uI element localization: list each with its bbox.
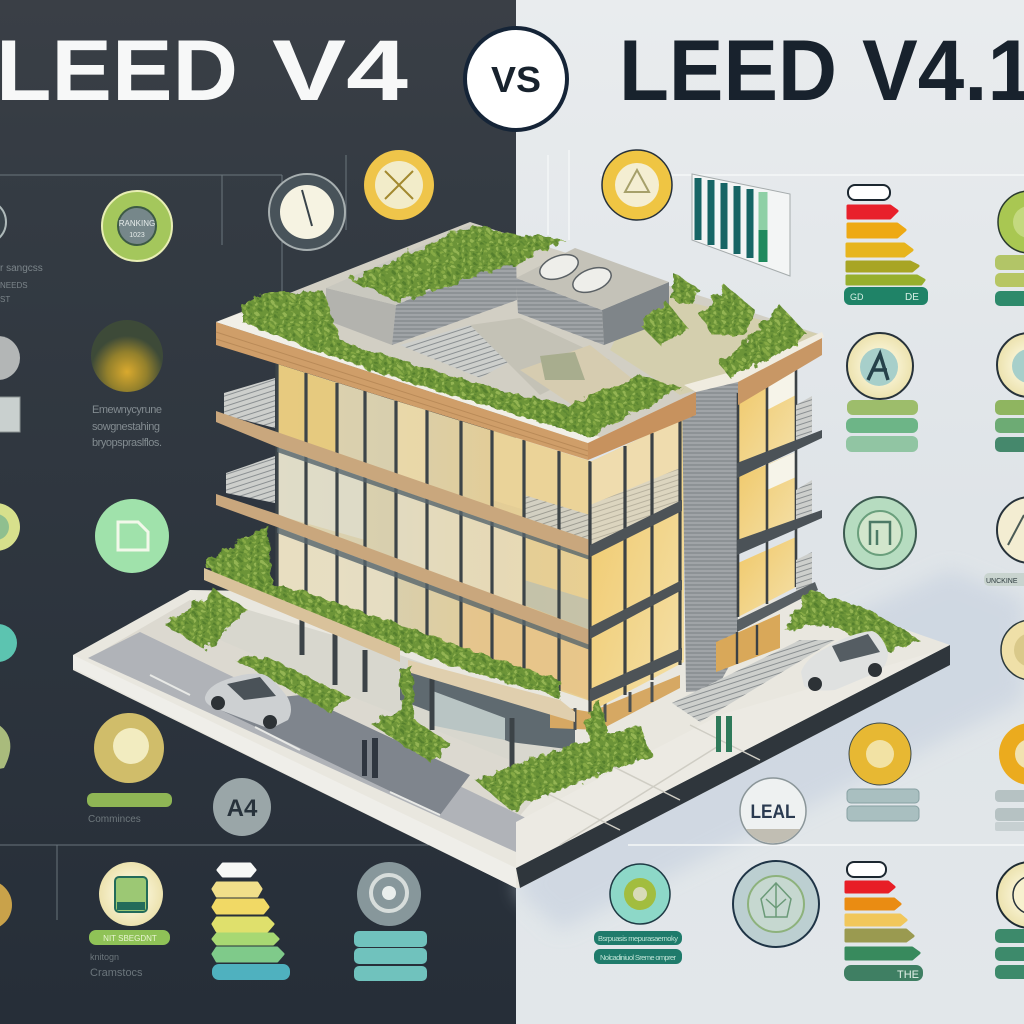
title: LEED V4.1: LEED <box>619 23 837 119</box>
icon: gauge ring at left edge <box>0 200 6 244</box>
label: dark teal pills <box>594 931 682 964</box>
icon: gold badge <box>849 723 911 785</box>
icon: clock badge <box>269 174 345 250</box>
ramp <box>672 640 835 722</box>
right wing glazing <box>716 367 822 672</box>
road <box>88 632 526 852</box>
label: green pill two <box>89 930 170 945</box>
people right <box>716 716 732 752</box>
roof deck <box>216 222 822 443</box>
icon: yellow star badge <box>602 150 672 220</box>
left facade glazing <box>277 364 590 701</box>
column: right light panel icons <box>594 150 1024 981</box>
badge: VS <box>465 28 567 130</box>
green roof planting <box>242 225 808 437</box>
icon: A4 badge: A4 <box>227 795 258 822</box>
icon: teal disc <box>0 624 17 662</box>
icon: leaf seal badge <box>733 861 819 947</box>
right facade glazing <box>590 418 684 712</box>
icon: yellow compass badge <box>364 150 434 220</box>
icon: chart badge edge <box>997 497 1024 563</box>
site base platform <box>73 590 950 888</box>
street plantings <box>165 590 920 810</box>
icon: rating badge: 1023 <box>129 232 145 239</box>
text: lower caption: Comminces <box>88 814 141 825</box>
text: energy caption <box>92 404 162 449</box>
icon: triangle badge <box>847 333 913 399</box>
illustration: isometric green building <box>73 222 950 888</box>
icon: teal target badge <box>610 864 670 924</box>
ground floor underside <box>215 600 680 770</box>
text: building caption: knitogn <box>90 952 119 962</box>
chart: energy label scale bottom <box>844 862 923 981</box>
chart: perspective bar chart <box>692 174 790 276</box>
pavement tiles <box>516 650 940 868</box>
icon: small panel photo <box>0 397 20 432</box>
second-level garden <box>208 525 560 698</box>
icon: olive globe <box>94 713 164 783</box>
label: three green pills <box>846 400 918 452</box>
icon: document badge <box>95 499 169 573</box>
label: dark teal pills: Nolcadiniuol Sreme omprer <box>600 953 676 962</box>
column: left dark panel icons <box>0 150 434 981</box>
lower slab <box>204 568 575 722</box>
roof deck details <box>400 318 640 410</box>
left floor slabs <box>216 411 590 650</box>
roof box one <box>326 225 517 345</box>
panel: LEED v4.1 light background <box>516 0 1024 1024</box>
car right <box>801 631 888 691</box>
corrugated core column <box>682 378 738 692</box>
label: olive pills edge <box>995 400 1024 452</box>
people left <box>362 738 378 778</box>
label: teal pills <box>354 931 427 981</box>
text: energy caption: sowgnestahing <box>92 421 160 433</box>
chart: energy label scale top: DE <box>905 292 919 303</box>
text: energy caption: bryopspraslflos. <box>92 437 162 449</box>
icon: mountain badge edge <box>997 333 1024 397</box>
label: green pill <box>87 793 172 807</box>
label: gray pills edge <box>995 790 1024 831</box>
chart: energy label scale top <box>844 185 928 305</box>
roof fascia <box>216 313 824 460</box>
car left <box>205 674 291 729</box>
icon: golden globe <box>91 320 163 392</box>
chart: energy label scale bottom: THE <box>897 969 919 981</box>
label: dark teal pills: Bsrpuasis rnepurasaemoky <box>598 934 678 943</box>
text: left edge caption one: ST <box>0 295 10 304</box>
chart: energy label scale top: GD <box>850 292 864 302</box>
icon: signal badge <box>357 862 421 926</box>
icon: green leaf badge edge <box>998 191 1024 253</box>
label: green pill two: NIT SBEGDNT <box>103 934 157 943</box>
title: LEED V4: V4 <box>272 23 408 119</box>
label: pale pill edge <box>984 573 1024 586</box>
text: left edge caption one: NEEDS <box>0 281 28 290</box>
text: left edge caption one: r sangcss <box>0 263 43 274</box>
roof box two <box>516 248 669 345</box>
icon: LEAL badge: LEAL <box>750 802 796 823</box>
icon: leaf at left edge <box>0 722 10 770</box>
ground shadow <box>516 570 1024 930</box>
icon: rating badge: RANKING <box>119 219 155 228</box>
icon: A4 badge <box>213 778 271 836</box>
label: green pills edge <box>995 255 1024 306</box>
text: building caption <box>90 952 143 979</box>
panel: LEED v4 dark background <box>0 0 516 1024</box>
label: green pills lower edge <box>995 929 1024 979</box>
text: energy caption: Emewnycyrune <box>92 404 162 416</box>
icon: gold disc left edge <box>0 880 12 930</box>
text: building caption: Cramstocs <box>90 967 143 979</box>
label: pale pill edge: UNCKINE <box>986 578 1018 585</box>
left balconies <box>224 378 275 503</box>
title: LEED V4: LEED <box>0 23 238 119</box>
icon: LEAL badge <box>740 778 806 844</box>
icon: pale green ring <box>0 503 20 551</box>
icon: rating badge <box>102 191 172 261</box>
badge: VS: VS <box>491 59 541 100</box>
icon: orange badge edge <box>999 723 1024 785</box>
icon: concentric badge edge <box>997 862 1024 928</box>
icon: silver disc <box>0 336 20 380</box>
text: left edge caption one <box>0 263 43 304</box>
chart: staircase rating scale dark <box>212 864 290 980</box>
icon: building plan badge <box>844 497 916 569</box>
icon: building badge <box>99 862 163 926</box>
icon: gold striped badge edge <box>1001 620 1024 680</box>
label: gray pills <box>847 789 919 821</box>
